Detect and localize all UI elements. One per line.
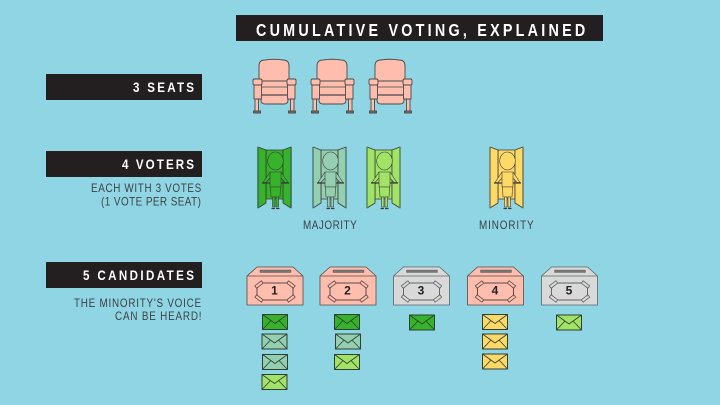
icon: voter booth light green bbox=[367, 147, 400, 208]
icon: voter booth dark green bbox=[258, 147, 291, 208]
ballot box 2 bbox=[320, 267, 376, 305]
label: 5 candidates: 5 CANDIDATES bbox=[83, 268, 194, 283]
icon: seat 1 bbox=[253, 59, 296, 113]
icon: voter booth yellow bbox=[490, 147, 523, 208]
ballot box 1: 1 bbox=[271, 284, 278, 298]
icon: seat 3 bbox=[369, 59, 412, 113]
ballot box 2: 2 bbox=[344, 284, 351, 298]
ballot box 4: 4 bbox=[492, 284, 499, 298]
text: minority voice: THE MINORITY'S VOICE bbox=[74, 297, 201, 310]
ballot box 1 bbox=[247, 267, 303, 305]
text: majority: MAJORITY bbox=[303, 219, 357, 232]
label: 4 voters: 4 VOTERS bbox=[122, 157, 194, 172]
ballot box 3: 3 bbox=[418, 284, 425, 298]
label: 5 candidates bbox=[46, 262, 202, 288]
envelopes: candidate 5 bbox=[556, 315, 582, 330]
ballot box 5 bbox=[542, 267, 598, 305]
ballot box 4 bbox=[468, 267, 524, 305]
ballot box 3 bbox=[394, 267, 450, 305]
label: 4 voters bbox=[46, 151, 202, 177]
envelopes: candidate 1 bbox=[262, 314, 288, 390]
label: 3 seats: 3 SEATS bbox=[133, 80, 194, 95]
seats row bbox=[253, 59, 412, 113]
text: minority: MINORITY bbox=[479, 219, 534, 232]
icon: voter booth teal bbox=[313, 147, 346, 208]
icon: seat 2 bbox=[311, 59, 354, 113]
label: 3 seats bbox=[46, 74, 202, 100]
envelopes: candidate 3 bbox=[410, 315, 434, 330]
text: minority voice bbox=[74, 297, 202, 323]
text: each with 3 votes: (1 VOTE PER SEAT) bbox=[101, 196, 201, 209]
envelopes: candidate 4 bbox=[482, 314, 508, 369]
envelopes: candidate 2 bbox=[334, 314, 360, 370]
text: each with 3 votes: EACH WITH 3 VOTES bbox=[91, 182, 201, 195]
text: minority voice: CAN BE HEARD! bbox=[115, 310, 202, 323]
ballot box 5: 5 bbox=[566, 284, 573, 298]
title: CUMULATIVE VOTING, EXPLAINED bbox=[256, 22, 585, 40]
text: each with 3 votes bbox=[91, 182, 201, 209]
title bbox=[236, 15, 603, 41]
